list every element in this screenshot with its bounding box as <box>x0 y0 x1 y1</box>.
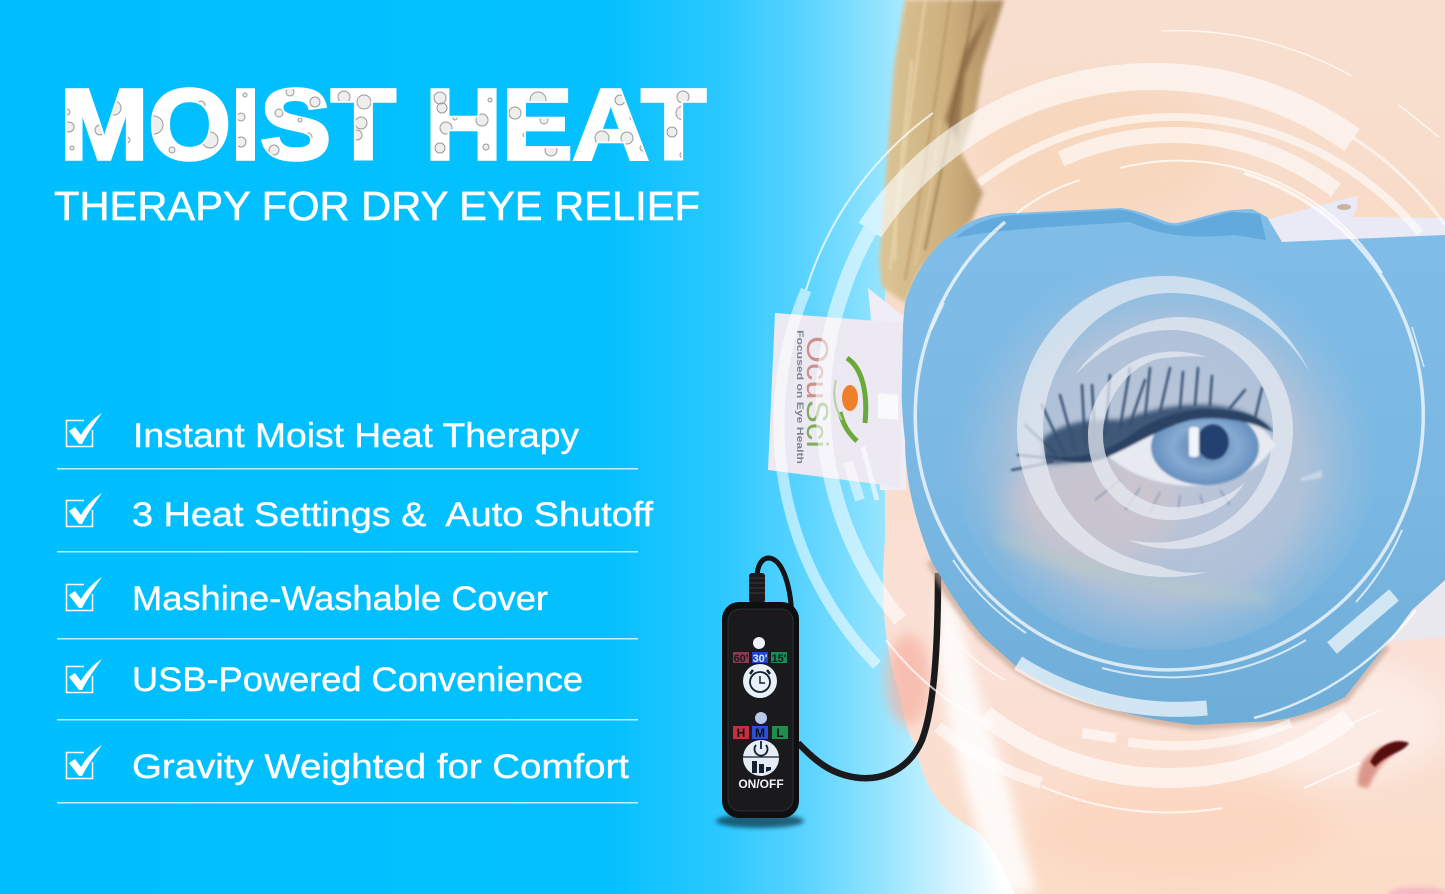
timer indicator <box>753 637 765 649</box>
icon: alarm clock button <box>743 664 777 698</box>
cable to mask <box>798 573 938 778</box>
mask <box>901 208 1445 725</box>
nose-side light skin <box>1230 660 1445 780</box>
strain relief <box>749 573 765 603</box>
pupil <box>1197 424 1229 460</box>
divider <box>57 802 638 804</box>
icon: checkbox <box>66 745 102 778</box>
icon: power button <box>743 740 779 776</box>
remote shadow <box>716 814 804 828</box>
outer spiral <box>1017 276 1310 577</box>
under-eye green tint <box>1000 535 1270 600</box>
icon: checkbox <box>66 413 102 446</box>
remote body <box>722 602 799 818</box>
tag: OcuSci <box>768 313 903 487</box>
feature 4 <box>66 659 583 699</box>
heat labels: H <box>737 726 745 740</box>
feature text: Instant Moist Heat Therapy <box>133 417 579 455</box>
lashes <box>1012 368 1262 470</box>
lips <box>1388 887 1445 894</box>
forehead warm tone <box>980 80 1220 220</box>
title: MOIST HEAT <box>65 87 707 162</box>
feature text: Gravity Weighted for Comfort <box>132 748 630 786</box>
catchlight <box>1189 427 1199 457</box>
feature 2 <box>66 493 654 534</box>
translucent skin veil <box>966 281 1364 650</box>
inner spiral <box>1088 352 1245 520</box>
water droplets in title <box>64 88 697 158</box>
lower lashes <box>1095 480 1230 512</box>
iris <box>1151 409 1259 485</box>
tear duct <box>1300 470 1322 481</box>
heat labels: L <box>776 726 784 740</box>
divider <box>57 468 638 470</box>
heat labels <box>733 726 788 740</box>
divider <box>57 719 638 720</box>
hair <box>879 0 1004 303</box>
tag tagline: Focused on Eye Health <box>795 330 805 464</box>
heat indicator <box>755 712 767 724</box>
eye <box>1012 368 1322 512</box>
feature text: Mashine-Washable Cover <box>132 580 548 618</box>
feature 3 <box>66 577 548 618</box>
divider <box>57 638 638 640</box>
dark hair shadow <box>945 10 990 140</box>
heat labels: M <box>755 726 765 740</box>
mask shadow on skin <box>931 560 1386 725</box>
hair streaks <box>890 0 975 280</box>
title: MOIST HEAT: MOIST HEAT <box>60 69 706 181</box>
icon: checkbox <box>66 577 102 610</box>
middle spiral <box>1075 317 1293 549</box>
tag logo <box>834 358 866 441</box>
upper lash line <box>1045 409 1274 462</box>
feature 5 <box>66 745 630 786</box>
nostril <box>1358 741 1409 788</box>
lower cheek warm tone <box>1030 780 1330 880</box>
timer labels: 60' <box>734 653 749 665</box>
timer labels: 30' <box>753 653 768 665</box>
timer labels <box>733 652 787 665</box>
top cable loop <box>757 558 792 625</box>
timer labels: 15' <box>772 653 787 665</box>
subtitle: THERAPY FOR DRY EYE RELIEF <box>54 183 700 229</box>
ear blush <box>886 634 930 726</box>
face photo <box>883 0 1445 894</box>
feature text: USB-Powered Convenience <box>132 661 583 699</box>
tag brand name: Ocu Sci <box>800 336 835 448</box>
icon: checkbox <box>66 659 102 692</box>
feature list <box>57 413 654 804</box>
white strap left <box>868 288 906 490</box>
lash mass <box>1043 405 1274 464</box>
sclera <box>1107 412 1275 486</box>
feature 1 <box>66 413 579 455</box>
feature text: 3 Heat Settings & Auto Shutoff <box>132 496 654 534</box>
on/off label: ON/OFF <box>738 777 784 791</box>
remote control <box>716 558 804 828</box>
radiating ring arcs <box>779 31 1445 813</box>
top fold of mask <box>955 210 1266 240</box>
cheek highlight strip <box>938 590 1036 894</box>
mask strap and zipper <box>1258 196 1445 642</box>
spiral rings around eye <box>1017 276 1310 577</box>
divider <box>57 551 638 552</box>
icon: checkbox <box>66 493 102 526</box>
under-eye warm tone <box>1005 455 1175 565</box>
